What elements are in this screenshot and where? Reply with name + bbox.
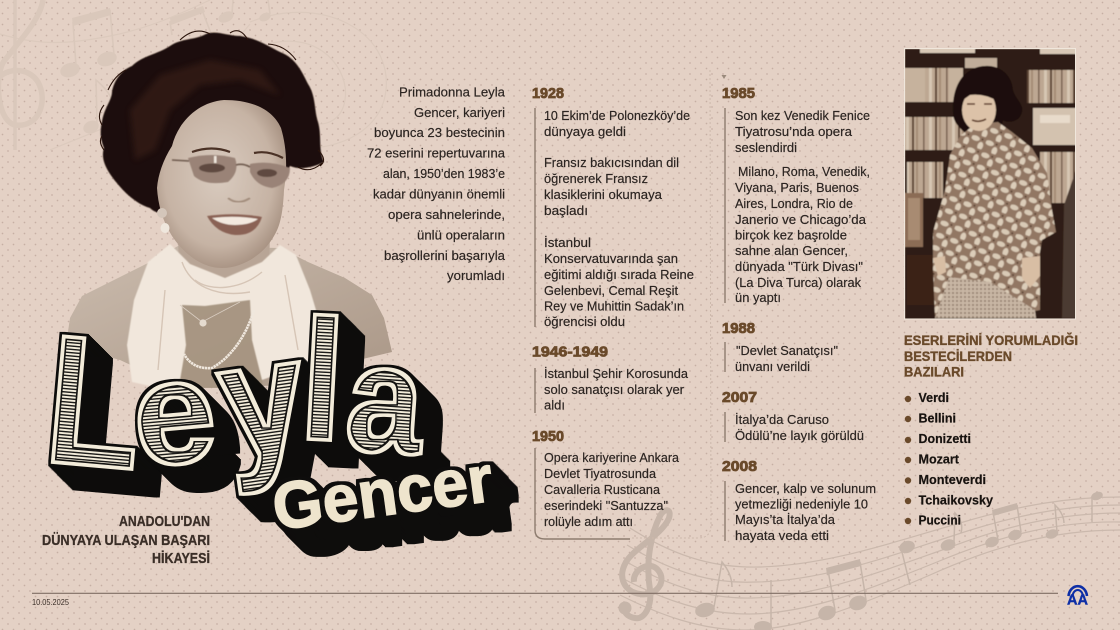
composers list: Donizetti <box>918 431 971 446</box>
chest <box>172 290 268 388</box>
title: Leyla: e <box>126 327 222 497</box>
composers heading: ESERLERİNİ YORUMLADIĞI <box>904 333 1078 348</box>
timeline: 1928: İstanbul <box>544 235 591 250</box>
intro text: yorumladı <box>447 268 505 283</box>
portrait: Leyla Gencer <box>66 31 392 392</box>
timeline: 1928: Fransız bakıcısından dil <box>544 155 679 170</box>
timeline: 1950: rolüyle adım attı <box>544 514 633 529</box>
composers list: Verdi <box>918 390 949 405</box>
treble clef <box>622 510 670 618</box>
neck <box>178 235 270 300</box>
timeline: 1985: dünyada "Türk Divası" <box>735 259 863 274</box>
subtitle: ANADOLU'DAN <box>119 513 210 530</box>
timeline: 2008: yetmezliği nedeniyle 10 <box>735 496 868 512</box>
composers list: Mozart <box>918 452 960 466</box>
timeline: 1928: Gelenbevi, Cemal Reşit <box>544 283 678 298</box>
hair <box>101 33 324 214</box>
subtitle: HİKAYESİ <box>152 550 210 567</box>
timeline: 1988: ünvanı verildi <box>735 359 810 374</box>
composers heading: BESTECİLERDEN <box>904 349 1012 364</box>
bookshelves <box>905 49 1076 305</box>
timeline: 1950: Opera kariyerine Ankara <box>544 450 680 465</box>
smile <box>207 214 262 235</box>
title: Leyla: a <box>341 311 431 487</box>
timeline: 2008: hayata veda etti <box>735 528 829 543</box>
glasses <box>172 155 290 188</box>
necklace <box>180 302 254 368</box>
timeline: 1928: 10 Ekim’de Polonezköy’de <box>544 108 690 123</box>
timeline: 1928: Konservatuvarında şan <box>544 251 678 266</box>
intro text: boyunca 23 bestecinin <box>374 125 505 140</box>
timeline: 1985: 1985 <box>722 86 755 102</box>
composers heading: BAZILARI <box>904 364 964 380</box>
footer rule <box>32 592 1058 594</box>
music staff: bottom right <box>618 490 1120 630</box>
timeline frame <box>630 70 726 538</box>
timeline: 1988 <box>722 321 838 374</box>
timeline: 1950: 1950 <box>532 429 564 445</box>
timeline: 1946-1949: İstanbul Şehir Korosunda <box>544 366 689 381</box>
timeline: 1985: sahne alan Gencer, <box>735 243 848 258</box>
timeline: 1985: (La Diva Turca) olarak <box>735 275 861 290</box>
timeline: 1985: Milano, Roma, Venedik, <box>738 164 870 179</box>
timeline: 1988: 1988 <box>722 321 755 337</box>
archive photo <box>905 49 1076 319</box>
timeline: 1928: 1928 <box>532 86 564 102</box>
jacket <box>66 246 392 388</box>
hair strands <box>99 31 324 170</box>
intro text: opera sahnelerinde, <box>388 207 505 222</box>
intro text: kadar dünyanın önemli <box>373 186 505 202</box>
subtitle <box>42 513 210 567</box>
face <box>962 89 996 131</box>
timeline: 2008: 2008 <box>722 459 757 475</box>
timeline: 2008: Mayıs’ta İtalya’da <box>735 512 836 527</box>
intro text: alan, 1950’den 1983’e <box>383 166 505 181</box>
timeline: 2007: 2007 <box>722 390 757 406</box>
composers list: Monteverdi <box>918 472 986 487</box>
composers list <box>905 390 994 528</box>
timeline: 1928: Rey ve Muhittin Sadak’ın <box>544 298 684 314</box>
timeline: 2007 <box>722 390 864 443</box>
intro text: Primadonna Leyla <box>399 84 506 100</box>
man at right <box>1062 170 1076 318</box>
AA logo: AA <box>1067 592 1088 608</box>
timeline: 1985 <box>722 86 870 305</box>
timeline: 1946-1949: solo sanatçısı olarak yer <box>544 382 685 397</box>
composers list: Bellini <box>918 410 956 426</box>
intro text: başrollerini başarıyla <box>384 248 506 263</box>
timeline: 2008 <box>722 459 876 543</box>
timeline: 1928 <box>532 86 694 329</box>
timeline: 1985: Son kez Venedik Fenice <box>735 108 870 123</box>
intro text: 72 eserini repertuvarına <box>367 146 506 160</box>
hands <box>933 256 1040 288</box>
title: Leyla: l <box>293 283 352 480</box>
timeline: 1985: birçok kez başrolde <box>735 228 847 242</box>
timeline: 1928: eğitimi aldığı sırada Reine <box>544 267 694 282</box>
photo border <box>904 48 1076 319</box>
earring <box>157 208 170 233</box>
eyebrows <box>192 148 283 158</box>
title: Leyla: y <box>208 303 316 496</box>
timeline: 1928: öğrencisi oldu <box>544 314 625 329</box>
date: 10.05.2025 <box>32 598 70 607</box>
timeline: 1946-1949 <box>532 344 689 413</box>
timeline: 1950 <box>532 429 680 539</box>
timeline: 2007: İtalya’da Caruso <box>735 412 829 427</box>
title: Gencer: Gencer <box>268 441 497 544</box>
timeline: 1928: klasiklerini okumaya <box>544 187 663 202</box>
music staff: top left <box>0 0 386 150</box>
title: Leyla <box>38 283 431 510</box>
composers list: Tchaikovsky <box>918 492 994 508</box>
timeline: 1950: Devlet Tiyatrosunda <box>544 466 657 481</box>
title: Leyla: L <box>38 295 152 510</box>
timeline: 1950: eserindeki "Santuzza" <box>544 498 668 513</box>
timeline: 1946-1949: 1946-1949 <box>532 344 608 360</box>
composers heading <box>904 333 1078 380</box>
timeline: 1985: Janerio ve Chicago’da <box>735 212 867 227</box>
intro text: ünlü operaların <box>417 228 505 242</box>
scarf <box>127 244 322 392</box>
timeline: 1985: seslendirdi <box>735 140 797 155</box>
dress <box>933 122 1056 318</box>
music notes <box>618 490 1104 630</box>
timeline: 1928: başladı <box>544 203 588 218</box>
nose shadow <box>228 198 250 202</box>
composers list: Puccini <box>918 512 961 528</box>
timeline: 1928: dünyaya geldi <box>544 124 626 139</box>
chair <box>935 277 1036 318</box>
subtitle: DÜNYAYA ULAŞAN BAŞARI <box>42 532 210 549</box>
face <box>157 100 286 268</box>
timeline: 2007: Ödülü’ne layık görüldü <box>735 428 864 443</box>
intro text: Gencer, kariyeri <box>414 105 505 120</box>
timeline: 1946-1949: aldı <box>544 398 565 412</box>
timeline: 1928: öğrenerek Fransız <box>544 171 648 186</box>
timeline: 1985: Viyana, Paris, Buenos <box>735 180 859 195</box>
timeline: 1950: Cavalleria Rusticana <box>544 482 661 497</box>
timeline: 1985: ün yaptı <box>735 290 781 305</box>
timeline: 1988: "Devlet Sanatçısı" <box>736 343 838 358</box>
intro text <box>367 84 506 283</box>
hair <box>953 66 1022 134</box>
timeline: 1985: Aires, Londra, Rio de <box>735 196 853 211</box>
timeline: 1985: Tiyatrosu’nda opera <box>735 124 853 139</box>
timeline: 2008: Gencer, kalp ve solunum <box>735 481 876 496</box>
